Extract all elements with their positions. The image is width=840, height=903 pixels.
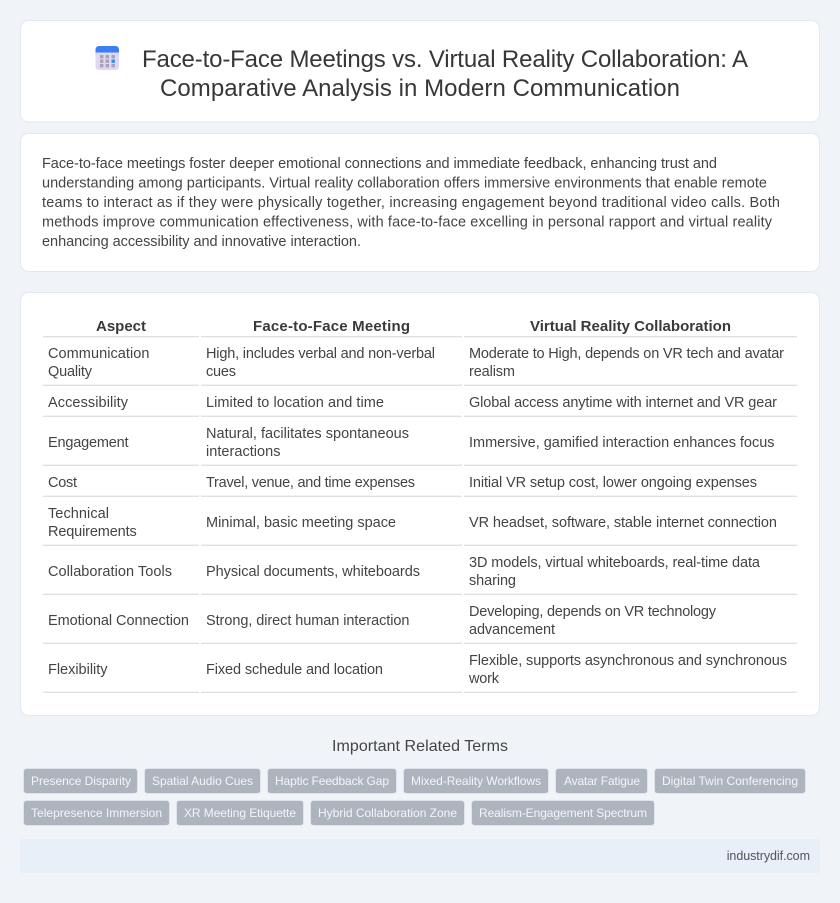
- footer: industrydif.com: [727, 849, 810, 863]
- row: flexibility: Fixed schedule and location: [206, 662, 383, 678]
- title: [142, 46, 748, 102]
- title: Comparative Analysis in Modern Communication: [160, 75, 680, 102]
- tag: digital twin conferencing: Digital Twin Conferencing: [662, 774, 798, 788]
- row: collaboration tools: [48, 555, 761, 589]
- panel: title header: [20, 20, 820, 122]
- row: technical requirements: Technical: [48, 506, 109, 522]
- row: accessibility: Global access anytime with internet and VR gear: [469, 395, 777, 411]
- table header row: Aspect: [96, 318, 146, 335]
- row: collaboration tools: sharing: [469, 573, 516, 589]
- tag: xr meeting etiquette: [176, 800, 304, 826]
- summary text: [42, 156, 780, 250]
- summary text: understanding among participants. Virtual reality collaboration offers immersive environments that enable remote: [42, 176, 767, 192]
- row: emotional connection: advancement: [469, 622, 555, 638]
- tag: realism-engagement spectrum: Realism-Engagement Spectrum: [479, 806, 647, 820]
- row: collaboration tools: 3D models, virtual whiteboards, real-time data: [469, 555, 761, 571]
- row: communication quality: Quality: [48, 364, 93, 380]
- table header row: Virtual Reality Collaboration: [530, 318, 731, 335]
- row: cost: Cost: [48, 475, 77, 491]
- row: cost: Travel, venue, and time expenses: [206, 475, 415, 491]
- row: flexibility: Flexible, supports asynchronous and synchronous: [469, 653, 787, 669]
- summary text: teams to interact as if they were physically together, increasing engagement beyond traditional video calls. Both: [42, 195, 780, 211]
- row: accessibility: [48, 395, 777, 411]
- tag: realism-engagement spectrum: [472, 800, 654, 826]
- panel: comparison table: [20, 292, 820, 716]
- tag: spatial audio cues: Spatial Audio Cues: [152, 774, 253, 788]
- table header row: Face-to-Face Meeting: [253, 318, 410, 335]
- tag: mixed-reality workflows: Mixed-Reality Workflows: [411, 774, 541, 788]
- row: flexibility: Flexibility: [48, 662, 108, 678]
- tag: xr meeting etiquette: XR Meeting Etiquette: [184, 806, 296, 820]
- row: emotional connection: [48, 604, 717, 638]
- row: emotional connection: Developing, depends on VR technology: [469, 604, 717, 620]
- row: cost: [48, 475, 757, 491]
- tag: presence disparity: Presence Disparity: [31, 774, 131, 788]
- row: communication quality: Communication: [48, 346, 150, 362]
- row: emotional connection: Emotional Connection: [48, 613, 189, 629]
- icon: calendar: [96, 46, 119, 70]
- summary text: methods improve communication effectiveness, with face-to-face excelling in personal rapport and virtual reality: [42, 214, 773, 230]
- footer: [20, 839, 820, 873]
- tag: spatial audio cues: [144, 768, 260, 794]
- row: technical requirements: [48, 506, 777, 540]
- row: technical requirements: VR headset, software, stable internet connection: [469, 515, 777, 531]
- tag: mixed-reality workflows: [404, 768, 548, 794]
- panel: related term tags: [24, 768, 806, 826]
- tag: telepresence immersion: [24, 800, 170, 826]
- row: communication quality: cues: [206, 364, 236, 380]
- tag: haptic feedback gap: Haptic Feedback Gap: [275, 774, 389, 788]
- row: engagement: Immersive, gamified interaction enhances focus: [469, 435, 774, 451]
- tag: haptic feedback gap: [268, 768, 396, 794]
- row: cost: Initial VR setup cost, lower ongoing expenses: [469, 475, 757, 491]
- tag: avatar fatigue: Avatar Fatigue: [564, 774, 640, 788]
- summary text: Face-to-face meetings foster deeper emotional connections and immediate feedback, enhancing trust and: [42, 156, 717, 172]
- row: engagement: Natural, facilitates spontaneous: [206, 426, 409, 442]
- heading: important related terms: Important Related Terms: [332, 738, 508, 755]
- summary text: enhancing accessibility and innovative interaction.: [42, 234, 361, 250]
- row: accessibility: Accessibility: [48, 395, 129, 411]
- panel: summary paragraph: [20, 134, 820, 272]
- table header row: [96, 318, 731, 335]
- tag: telepresence immersion: Telepresence Immersion: [31, 806, 162, 820]
- tag: hybrid collaboration zone: Hybrid Collaboration Zone: [318, 806, 457, 820]
- row: engagement: Engagement: [48, 435, 128, 451]
- row: engagement: [48, 426, 774, 460]
- tag: digital twin conferencing: [654, 768, 806, 794]
- row: communication quality: realism: [469, 364, 515, 380]
- row: technical requirements: Minimal, basic meeting space: [206, 515, 396, 531]
- tag: presence disparity: [24, 768, 138, 794]
- row: flexibility: [48, 653, 787, 687]
- row: collaboration tools: Collaboration Tools: [48, 564, 172, 580]
- row: communication quality: High, includes verbal and non-verbal: [206, 346, 435, 362]
- row: technical requirements: Requirements: [48, 524, 137, 540]
- tag: avatar fatigue: [556, 768, 648, 794]
- row: emotional connection: Strong, direct human interaction: [206, 613, 410, 629]
- row: flexibility: work: [468, 671, 500, 687]
- row: communication quality: [48, 346, 784, 380]
- row: accessibility: Limited to location and time: [206, 395, 384, 411]
- row: communication quality: Moderate to High, depends on VR tech and avatar: [469, 346, 784, 362]
- row: engagement: interactions: [206, 444, 280, 460]
- title: Face-to-Face Meetings vs. Virtual Reality Collaboration: A: [142, 46, 748, 73]
- tag: hybrid collaboration zone: [310, 800, 464, 826]
- row: collaboration tools: Physical documents, whiteboards: [206, 564, 420, 580]
